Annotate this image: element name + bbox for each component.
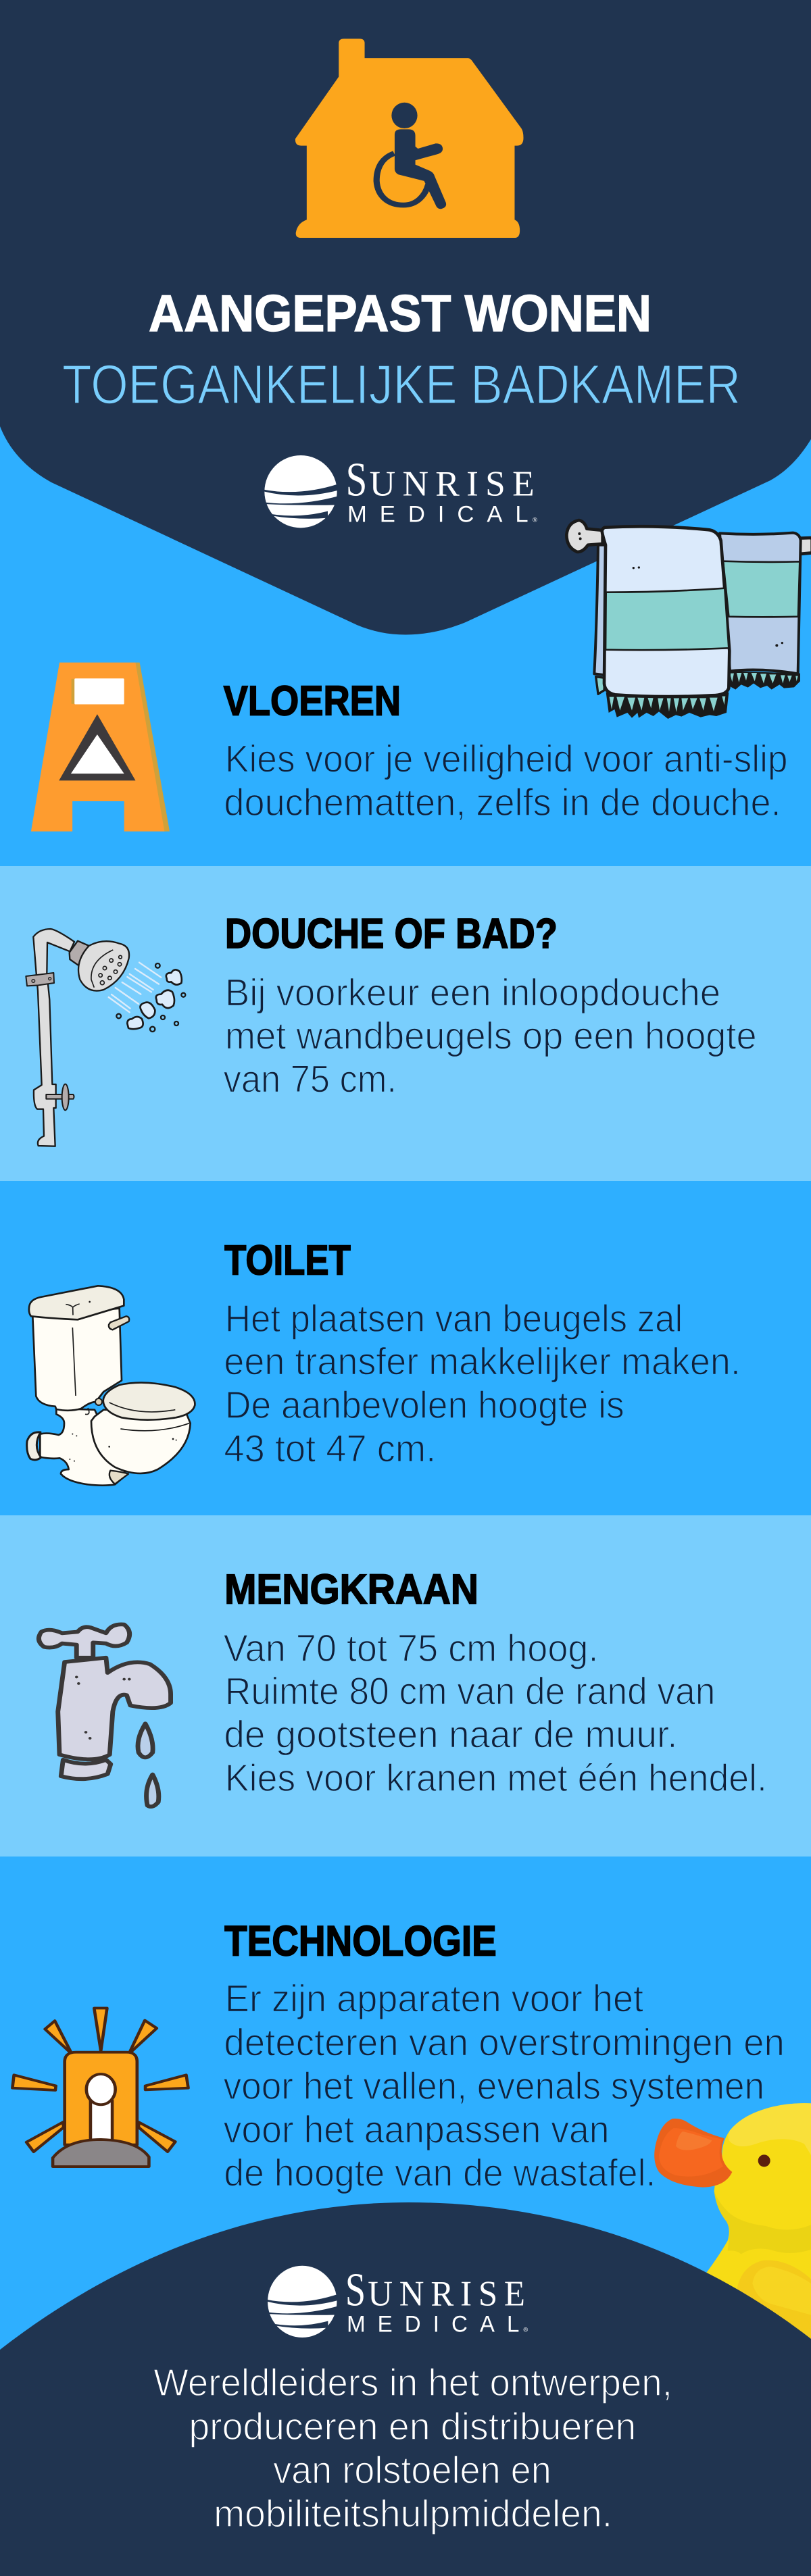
footer text: produceren en distribueren [189,2406,636,2448]
body text: Van 70 tot 75 cm hoog. [224,1627,598,1669]
icon: shower [26,929,185,1146]
back towel fringe [729,671,800,690]
icon: towels on rail [566,520,811,719]
logo: Sunrise Medical: UNRISE [368,2275,525,2314]
icon: house with wheelchair user [295,39,523,238]
icon: alarm light [12,2008,189,2167]
panel: footer [0,2202,811,2576]
side fold [594,545,606,675]
section: toilet [27,1238,741,1486]
logo: Sunrise Medical: ® [523,2326,528,2333]
logo: Sunrise Medical: MEDICAL [347,502,529,528]
heading: MENGKRAAN [224,1566,478,1613]
body text [224,1298,741,1470]
icon: dripping tap [39,1624,171,1807]
band: mengkraan [0,1515,811,1857]
footer text [153,2362,672,2535]
logo: Sunrise Medical: S [346,453,367,506]
title: AANGEPAST WONEN [149,285,652,343]
body text: de gootsteen naar de muur. [224,1714,678,1756]
heading: VLOEREN [224,678,401,724]
footer text: Wereldleiders in het ontwerpen, [153,2362,672,2404]
logo: Sunrise Medical [266,2263,528,2338]
icon: toilet [27,1286,195,1486]
body text [224,1627,767,1799]
heading: TECHNOLOGIE [224,1917,497,1965]
panel: header [0,0,811,635]
logo: Sunrise Medical: ® [533,517,537,524]
front towel [602,526,729,697]
footer text: van rolstoelen en [273,2449,551,2492]
heading: TOILET [224,1238,351,1284]
section: douche of bad [26,911,757,1146]
heading: DOUCHE OF BAD? [225,911,558,957]
footer text: mobiliteitshulpmiddelen. [214,2493,612,2535]
logo: Sunrise Medical: S [345,2263,366,2316]
body text: de hoogte van de wastafel. [224,2152,656,2194]
body text [224,1977,785,2194]
body text [224,971,757,1101]
body text [224,738,788,824]
front towel fringe [606,692,729,719]
section: vloeren [31,663,788,832]
band: douche [0,866,811,1181]
section: mengkraan [39,1566,767,1807]
body text: 43 tot 47 cm. [224,1428,436,1470]
body text: De aanbevolen hoogte is [225,1384,624,1427]
logo: Sunrise Medical [262,453,537,528]
body text: Er zijn apparaten voor het [225,1977,643,2020]
body text: Het plaatsen van beugels zal [225,1298,683,1340]
section: technologie [12,1917,785,2194]
logo: Sunrise Medical: MEDICAL [347,2311,519,2338]
body text: van 75 cm. [224,1059,397,1101]
body text: voor het aanpassen van [224,2108,610,2151]
icon: rubber duck [654,2103,811,2342]
logo: Sunrise Medical: UNRISE [370,463,535,503]
icon: wet floor sign [31,663,170,832]
towel rail [566,520,811,554]
back towel [720,533,801,674]
header shape [0,0,811,635]
footer shape [0,2202,811,2576]
